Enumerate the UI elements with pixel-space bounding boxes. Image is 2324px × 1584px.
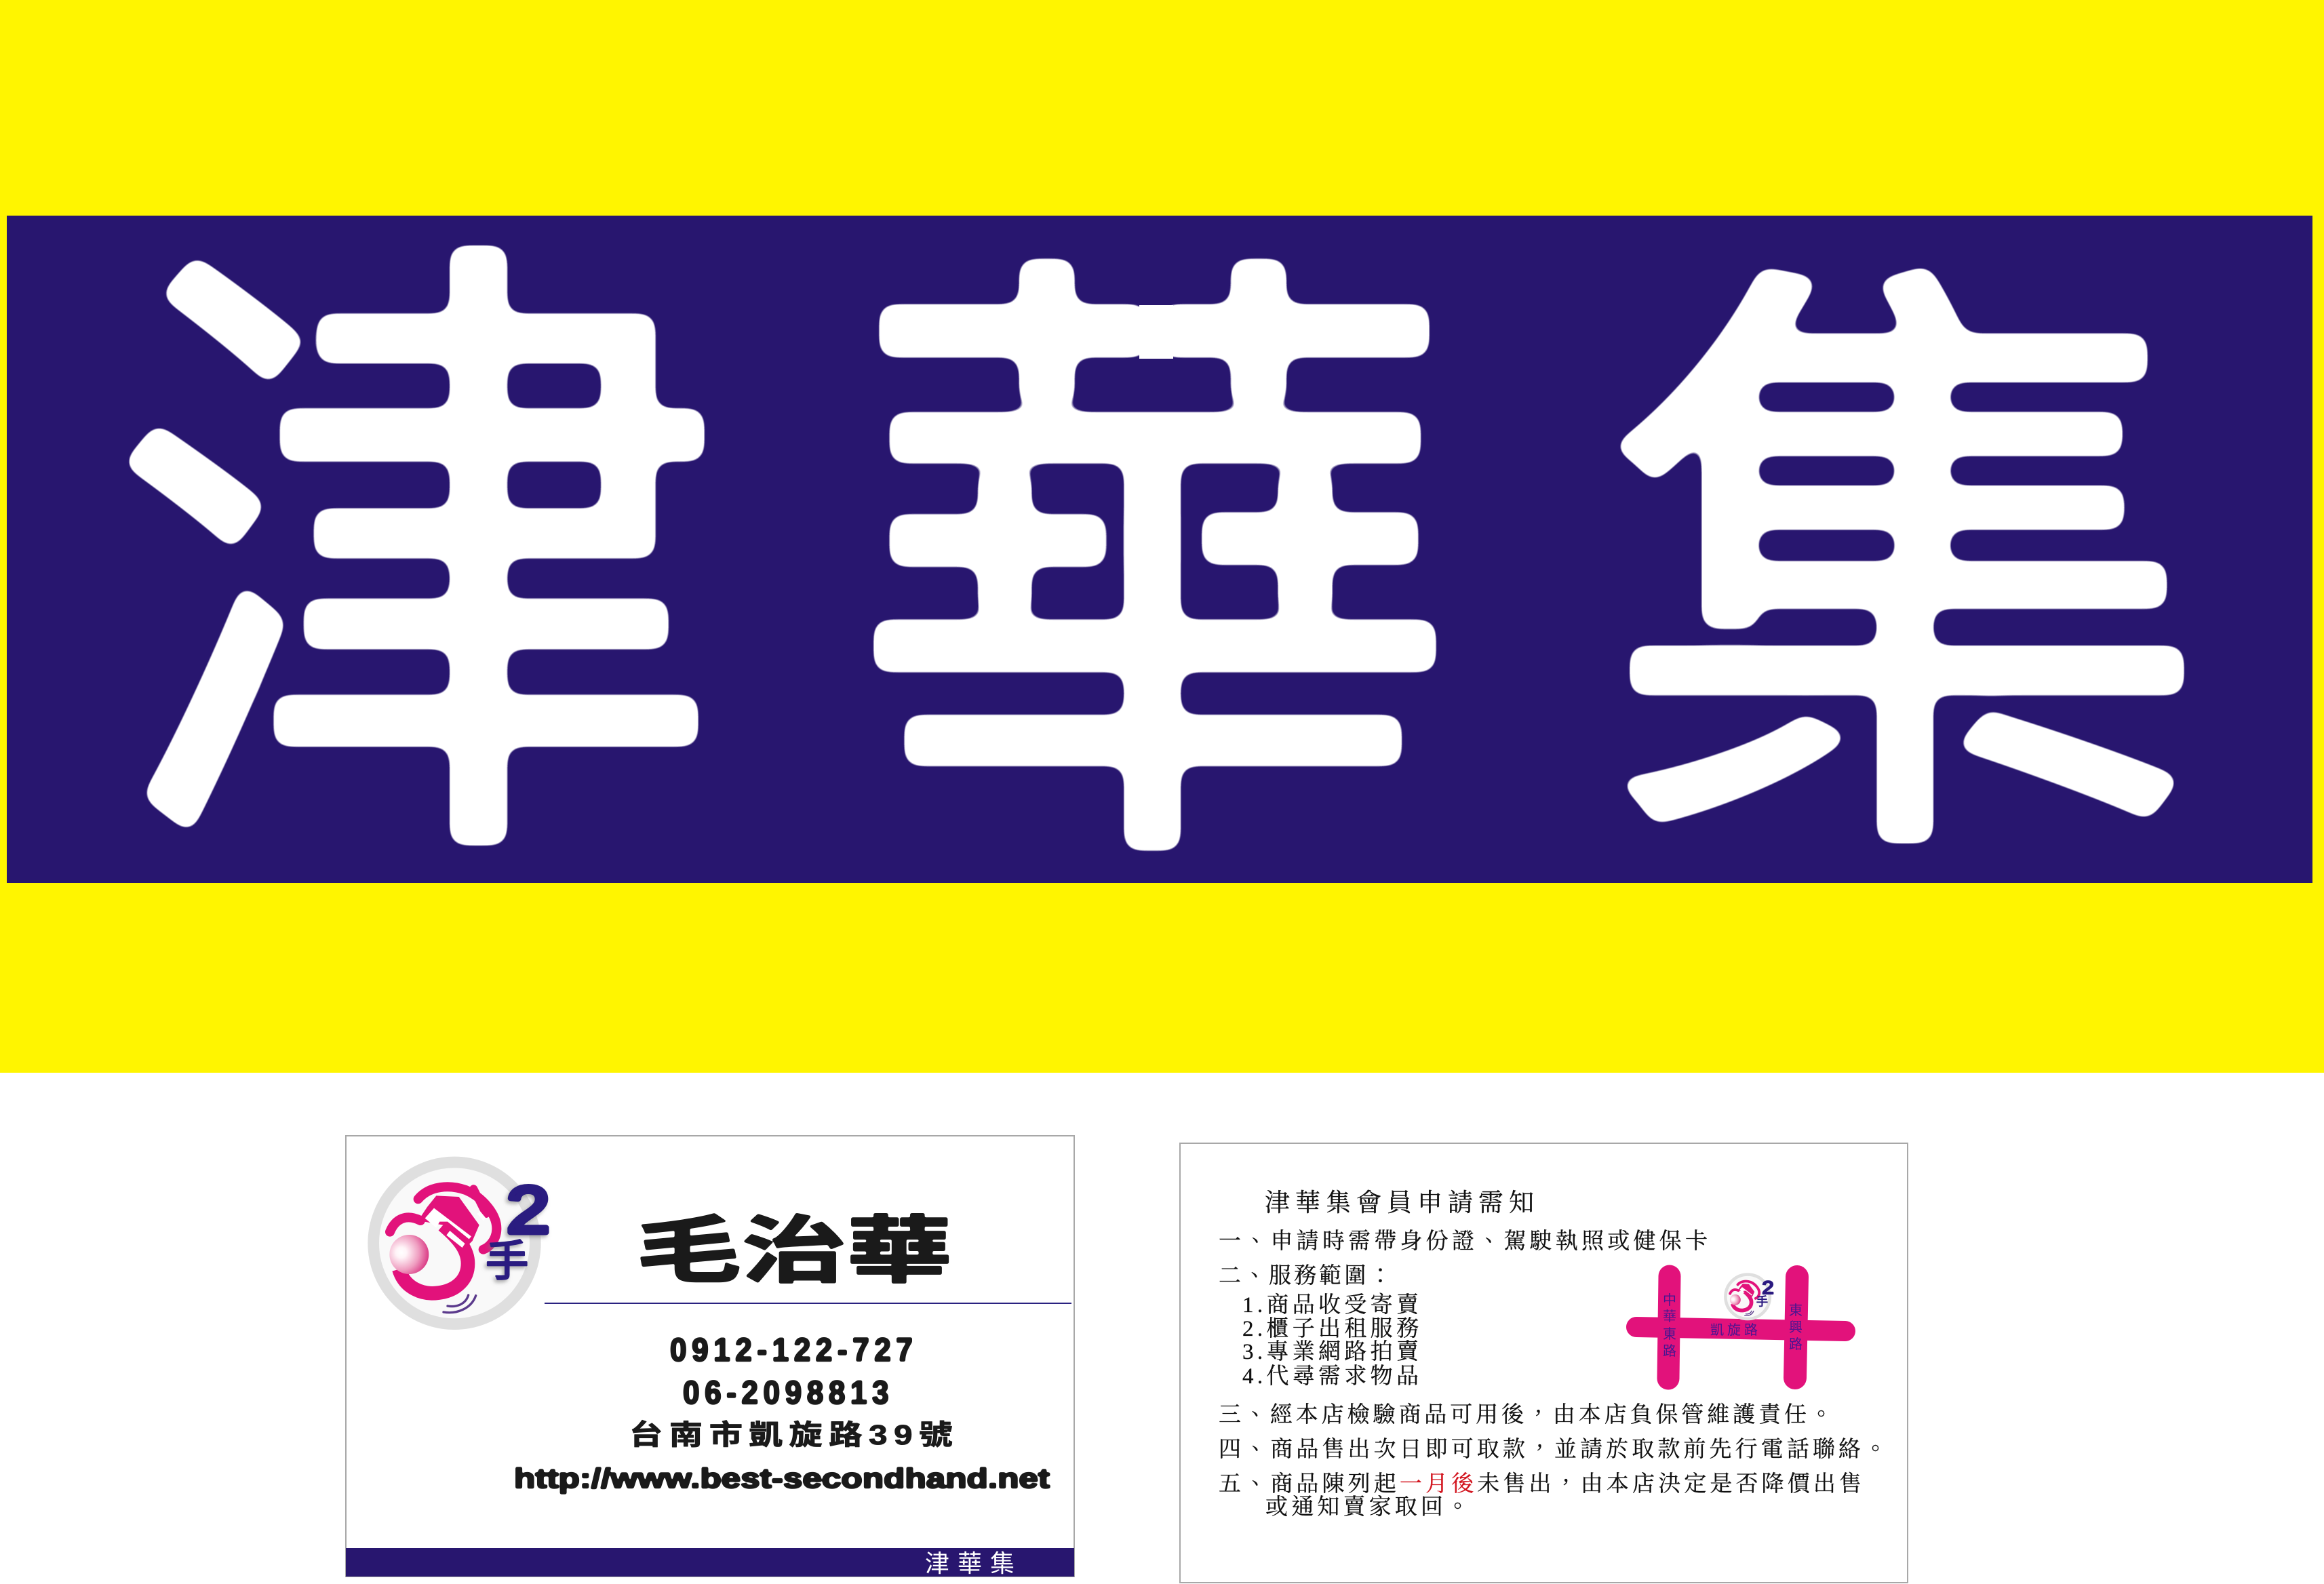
map: store location xyxy=(1636,1275,1845,1379)
service list xyxy=(1242,1292,1420,1389)
mobile number: 0912-122-727 xyxy=(670,1331,913,1368)
footer strip: 津華集 xyxy=(925,1549,1015,1577)
service list: 2.櫃子出租服務 xyxy=(1242,1316,1419,1341)
service list: 3.專業網路拍賣 xyxy=(1242,1339,1420,1364)
panel: business card front xyxy=(346,1136,1074,1577)
map label: 中華東路: 華 xyxy=(1663,1309,1676,1324)
notice title: 津華集會員申請需知 xyxy=(1265,1189,1534,1217)
icon: shop logo: 2 xyxy=(507,1174,550,1246)
icon: small shop logo: 2 xyxy=(1762,1278,1774,1298)
heading character: 華: 華 xyxy=(848,224,1461,928)
map label: 東興路 xyxy=(1789,1303,1803,1352)
map label: 中華東路 xyxy=(1663,1292,1676,1359)
banner: yellow background xyxy=(0,0,2324,1073)
icon: shop logo: 手 xyxy=(486,1238,528,1285)
address: 台南市凱旋路39號 xyxy=(629,1419,952,1450)
heading character: 津: 津 xyxy=(108,210,726,926)
icon: small shop logo: 手 xyxy=(1756,1294,1768,1308)
notice item 1: 一、申請時需帶身份證、駕駛執照或健保卡 xyxy=(1219,1229,1708,1254)
notice item 3: 三、經本店檢驗商品可用後，由本店負保管維護責任。 xyxy=(1219,1402,1832,1427)
divider rule xyxy=(545,1303,1071,1304)
map label: 中華東路: 路 xyxy=(1663,1343,1676,1359)
map label: 東興路: 東 xyxy=(1789,1303,1803,1318)
service list: 4.代尋需求物品 xyxy=(1242,1364,1419,1389)
name: 毛治華 xyxy=(636,1210,952,1292)
map label: 東興路: 路 xyxy=(1789,1336,1803,1352)
banner: navy panel with shop name xyxy=(7,210,2312,928)
telephone number: 06-2098813 xyxy=(683,1374,889,1410)
notice item 4: 四、商品售出次日即可取款，並請於取款前先行電話聯絡。 xyxy=(1219,1437,1887,1462)
panel: membership notice card xyxy=(1180,1143,1908,1583)
footer strip xyxy=(346,1548,1074,1577)
notice item 5 continued: 或通知賣家取回。 xyxy=(1265,1494,1469,1520)
map label: 凱旋路: 凱旋路 xyxy=(1710,1322,1758,1338)
service list: 1.商品收受寄賣 xyxy=(1242,1292,1420,1318)
notice item 2 heading: 二、服務範圍： xyxy=(1219,1263,1392,1288)
website: http://www.best-secondhand.net xyxy=(514,1463,1050,1494)
map label: 中華東路: 東 xyxy=(1663,1326,1676,1342)
icon: shop logo xyxy=(374,1162,550,1324)
map label: 東興路: 興 xyxy=(1789,1320,1803,1335)
heading character: 集: 集 xyxy=(1602,234,2211,919)
map label: 中華東路: 中 xyxy=(1663,1292,1676,1308)
icon: small shop logo xyxy=(1725,1275,1774,1319)
notice item 5: 五、商品陳列起一月後未售出，由本店決定是否降價出售 xyxy=(1219,1471,1862,1497)
